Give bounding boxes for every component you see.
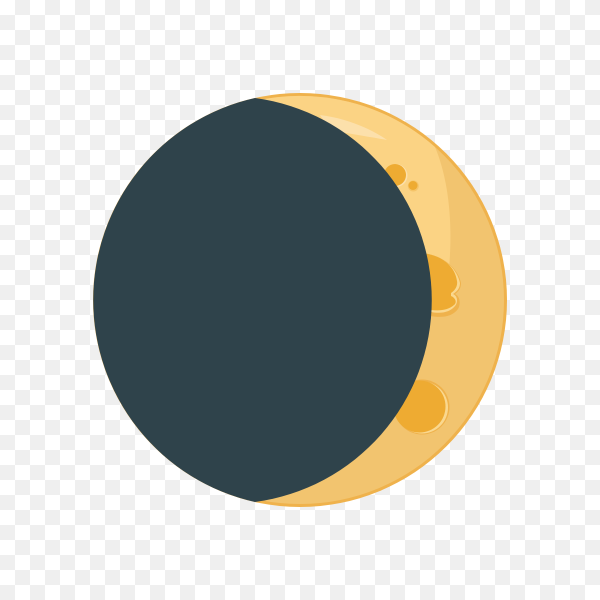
crater: upper large [384, 164, 408, 187]
crater: lower large [394, 380, 450, 434]
crater: middle double lobe [415, 253, 461, 317]
dark shadow of the moon [93, 98, 432, 502]
light band of the crescent [250, 96, 450, 310]
crater: upper small [408, 180, 419, 192]
highlight streak [320, 115, 387, 140]
crater: hidden sliver near bottom [331, 449, 349, 467]
moon disc [93, 93, 507, 507]
